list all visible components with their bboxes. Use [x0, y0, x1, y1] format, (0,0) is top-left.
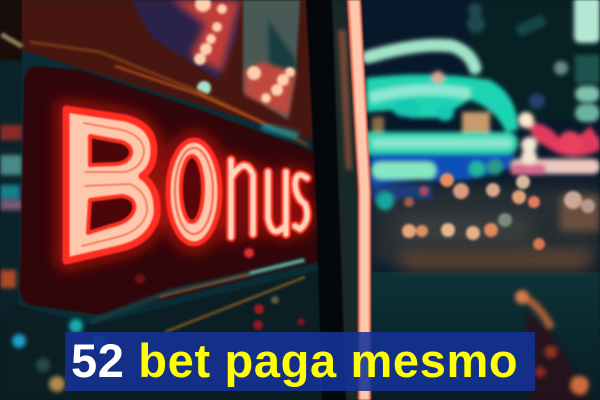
sign lower edge lights — [90, 248, 305, 332]
title banner: 52 bet paga mesmo — [71, 334, 518, 387]
neon word: Bonus — [63, 106, 308, 264]
left casing: dark red panel — [0, 0, 345, 400]
lower sign bokeh dots — [93, 296, 305, 347]
sign top edge highlight — [30, 42, 308, 145]
neon letter O — [168, 140, 220, 244]
decorative panels top — [0, 0, 300, 120]
neon letters nus — [231, 160, 307, 237]
teal neon rings — [352, 45, 518, 210]
background: right city — [340, 0, 600, 400]
bokeh lights — [402, 173, 595, 250]
left edge blurred lights — [0, 125, 83, 392]
black pillar and pink tube — [306, 0, 371, 400]
foreground blurred object bottom right — [515, 290, 590, 400]
neon glow — [63, 106, 308, 264]
sign body — [20, 66, 318, 315]
neon letter B — [66, 109, 157, 261]
pink neon and white tube right — [467, 0, 600, 175]
